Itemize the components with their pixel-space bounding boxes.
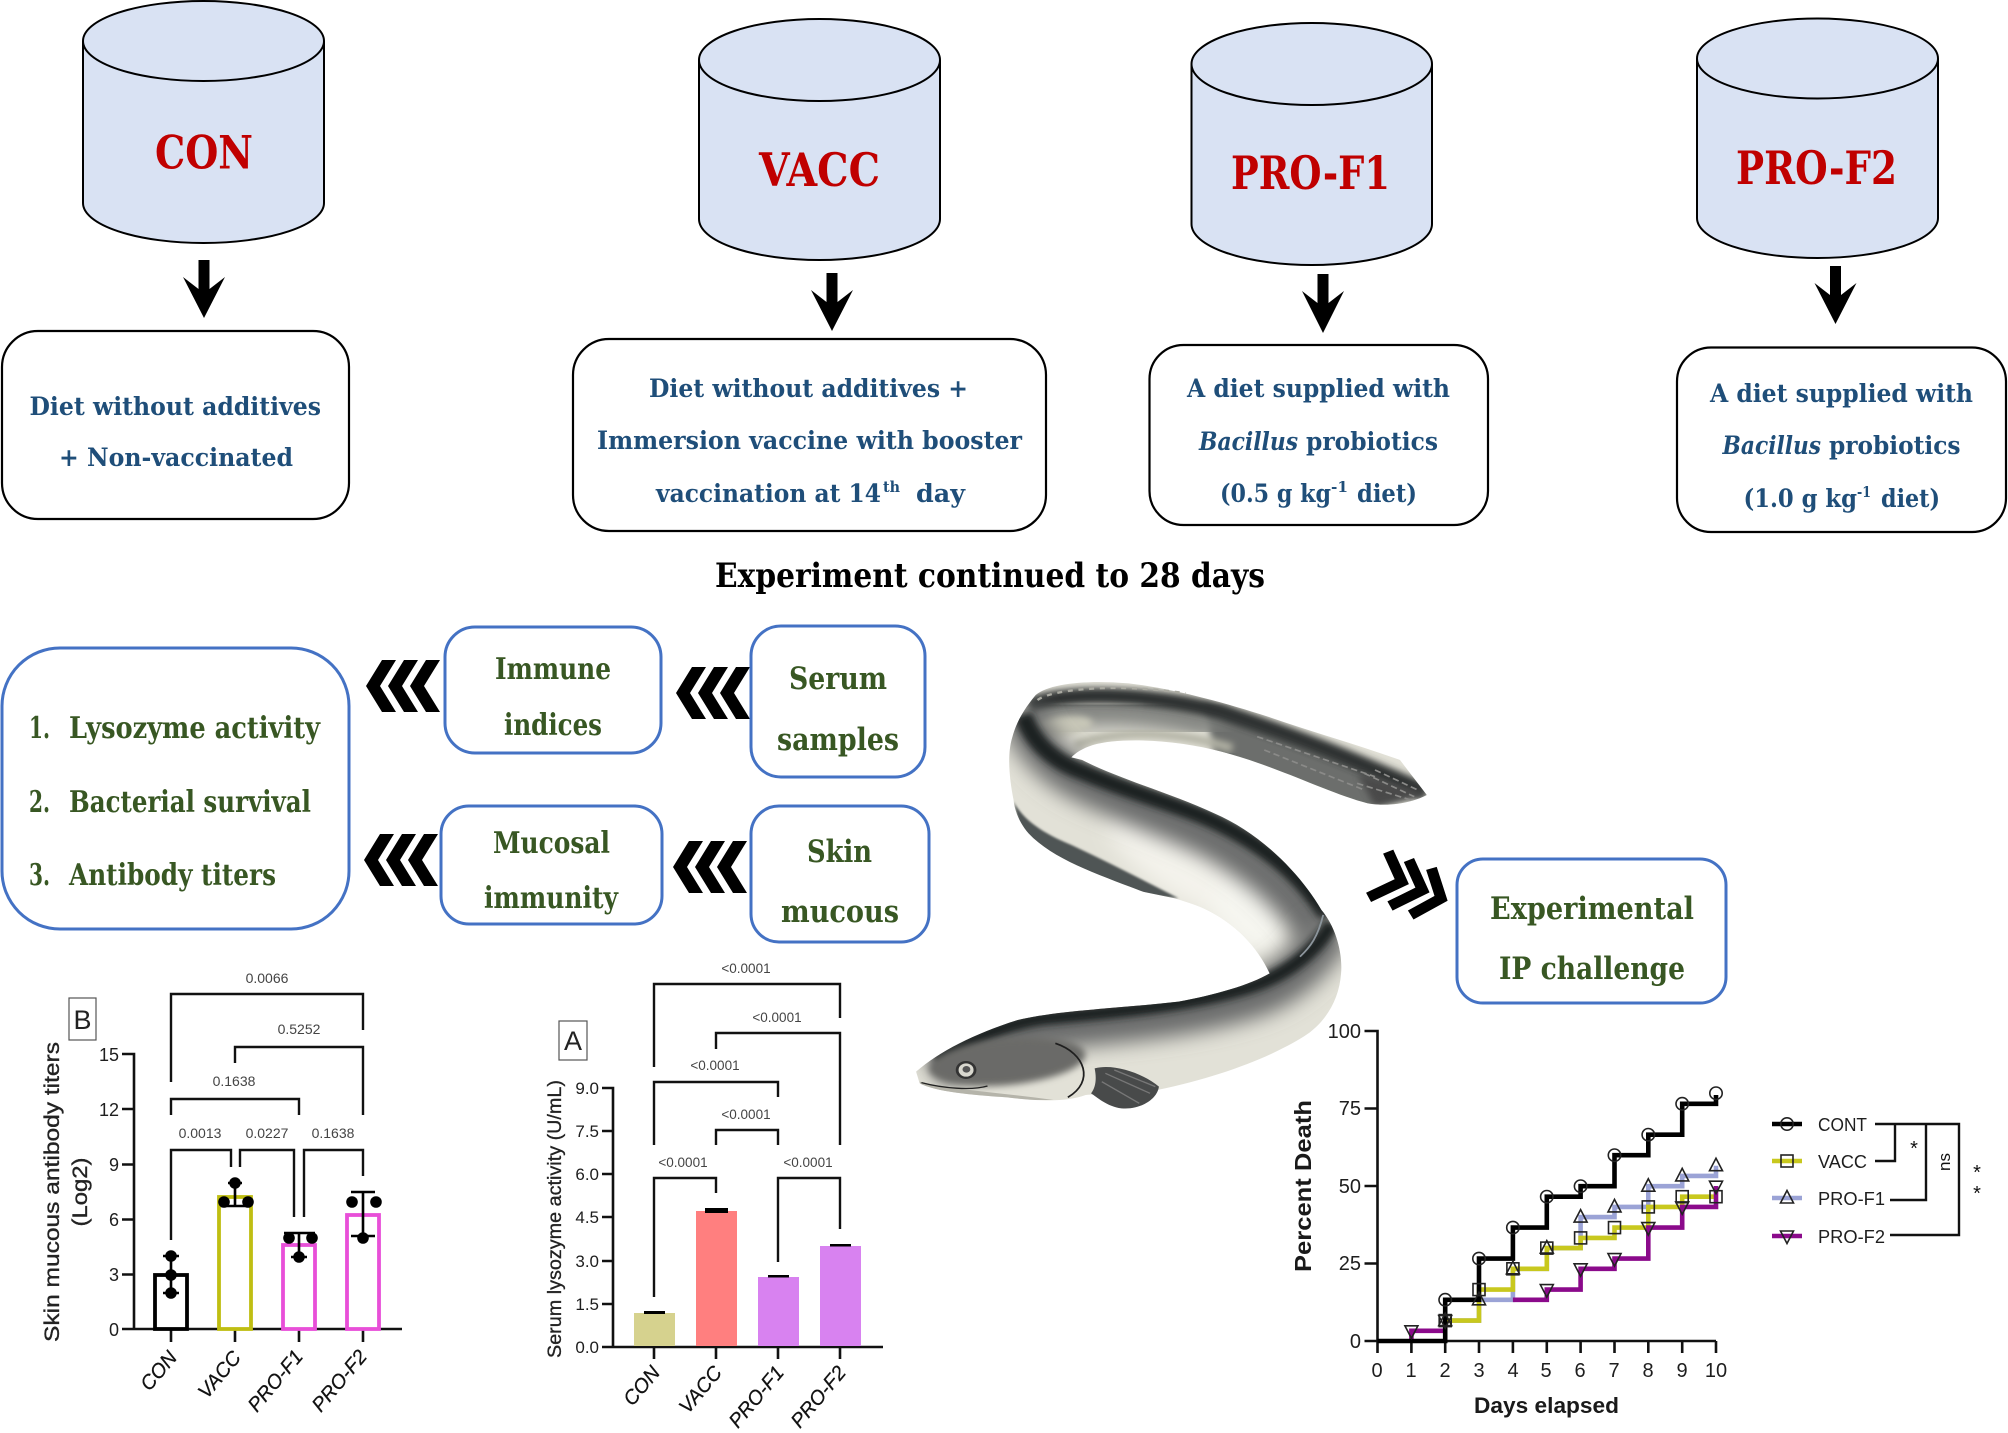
y tick labels: 25 bbox=[1339, 1253, 1361, 1275]
p values bbox=[658, 961, 833, 1170]
y tick labels: 0 bbox=[109, 1320, 119, 1340]
box: immune indices: indices bbox=[504, 708, 602, 743]
p values: 0.0013 bbox=[179, 1125, 222, 1141]
box: CON diet: Diet without additives bbox=[30, 392, 321, 421]
box: VACC diet: Diet without additives + bbox=[649, 374, 968, 403]
box: serum samples: Serum bbox=[789, 661, 887, 697]
p values: 0.5252 bbox=[278, 1021, 321, 1037]
p values: 0.0066 bbox=[246, 970, 289, 986]
box: experimental IP challenge: IP challenge bbox=[1499, 951, 1685, 987]
legend bbox=[1772, 1115, 1885, 1247]
box: PRO-F1 diet: diet) bbox=[1357, 479, 1417, 508]
arrow: CON down bbox=[183, 260, 225, 318]
category labels bbox=[136, 1346, 372, 1416]
significance brackets: ns bbox=[1935, 1153, 1954, 1171]
y axis title: Serum lysozyme activity (U/mL) bbox=[545, 1080, 566, 1358]
box: VACC diet: vaccination at 14 bbox=[655, 479, 881, 508]
box: skin mucous bbox=[751, 806, 929, 942]
category labels: VACC bbox=[194, 1347, 246, 1403]
badge: B: B bbox=[73, 1005, 92, 1035]
box: PRO-F2 diet: A diet supplied with bbox=[1709, 379, 1973, 408]
axes bbox=[122, 1054, 402, 1342]
y axis title: Percent Death bbox=[1290, 1100, 1316, 1272]
chart: skin mucous antibody titers (B) bbox=[41, 970, 402, 1416]
error bars and data points bbox=[163, 1177, 382, 1299]
significance brackets: * bbox=[1973, 1183, 1981, 1205]
p values bbox=[179, 970, 355, 1141]
box: PRO-F2 diet: (1.0 g kg bbox=[1744, 484, 1857, 513]
box: immune indices bbox=[445, 627, 661, 753]
x tick labels: 7 bbox=[1608, 1360, 1620, 1382]
box: PRO-F2 diet bbox=[1677, 348, 2006, 532]
cylinder: PRO-F1 bbox=[1192, 23, 1432, 265]
label: PRO-F1: PRO-F1 bbox=[1231, 146, 1390, 200]
heading: experiment duration: Experiment continued to 28 days bbox=[715, 556, 1265, 596]
box: VACC diet: Immersion vaccine with booster bbox=[597, 426, 1023, 455]
box: PRO-F1 diet: A diet supplied with bbox=[1186, 374, 1450, 403]
box: experimental IP challenge: Experimental bbox=[1490, 891, 1694, 927]
significance brackets: * bbox=[1973, 1162, 1981, 1184]
label: VACC: VACC bbox=[758, 143, 880, 197]
p values: <0.0001 bbox=[721, 1107, 771, 1122]
box: CON diet: + Non-vaccinated bbox=[59, 443, 293, 472]
box: PRO-F1 diet: probiotics bbox=[1306, 427, 1438, 456]
box: skin mucous: mucous bbox=[781, 894, 899, 930]
panel: VACC group bbox=[573, 19, 1046, 531]
x tick labels: 9 bbox=[1676, 1360, 1688, 1382]
badge: A bbox=[559, 1021, 587, 1060]
badge: B bbox=[69, 998, 96, 1040]
y tick labels bbox=[99, 1045, 119, 1340]
x axis title: Days elapsed bbox=[1474, 1393, 1619, 1418]
box: VACC diet: th bbox=[883, 478, 900, 496]
y tick labels: 100 bbox=[1328, 1021, 1361, 1043]
badge: A: A bbox=[564, 1026, 582, 1056]
line: PRO-F2 bbox=[1411, 1186, 1716, 1341]
box: assay list: Bacterial survival bbox=[69, 785, 311, 820]
axes bbox=[1364, 1031, 1716, 1353]
box: mucosal immunity: immunity bbox=[484, 881, 619, 916]
box: serum samples bbox=[751, 626, 925, 777]
significance brackets bbox=[171, 994, 363, 1240]
box: assay list: 2. bbox=[29, 785, 50, 820]
icon: chevrons to IP challenge bbox=[1369, 852, 1441, 915]
x tick labels bbox=[1371, 1360, 1727, 1382]
bars bbox=[155, 1197, 379, 1329]
y tick labels: 7.5 bbox=[575, 1122, 599, 1141]
panel: PRO-F2 group bbox=[1677, 18, 2006, 532]
legend: CONT bbox=[1818, 1115, 1867, 1135]
line: PRO-F1 bbox=[1445, 1166, 1716, 1321]
arrow: VACC down bbox=[811, 273, 853, 331]
box: PRO-F1 diet bbox=[1150, 345, 1488, 525]
box: experimental IP challenge bbox=[1457, 859, 1726, 1003]
x tick labels: 8 bbox=[1642, 1360, 1654, 1382]
arrow: PRO-F2 down bbox=[1814, 266, 1856, 324]
cylinder: PRO-F2 bbox=[1697, 18, 1938, 258]
y tick labels: 50 bbox=[1339, 1176, 1361, 1198]
category labels: PRO-F1 bbox=[244, 1346, 308, 1416]
box: PRO-F2 diet: Bacillus bbox=[1722, 431, 1821, 460]
y tick labels bbox=[1328, 1021, 1361, 1353]
x tick labels: 5 bbox=[1540, 1360, 1552, 1382]
category labels: VACC bbox=[675, 1362, 727, 1418]
box: assay list bbox=[2, 648, 349, 929]
cylinder: CON bbox=[83, 1, 324, 243]
legend: PRO-F2 bbox=[1818, 1227, 1885, 1247]
panel: PRO-F1 group bbox=[1150, 23, 1488, 525]
box: PRO-F1 diet: (0.5 g kg bbox=[1220, 479, 1331, 508]
axes bbox=[602, 1088, 883, 1359]
markers bbox=[1405, 1087, 1722, 1338]
box: skin mucous: Skin bbox=[807, 834, 872, 870]
y axis title: Skin mucous antibody titers bbox=[41, 1042, 64, 1342]
y tick labels: 75 bbox=[1339, 1098, 1361, 1120]
category labels: CON bbox=[136, 1347, 182, 1395]
box: PRO-F2 diet: -1 bbox=[1857, 483, 1871, 501]
p values: 0.1638 bbox=[213, 1073, 256, 1089]
box: mucosal immunity bbox=[441, 806, 662, 924]
p values: <0.0001 bbox=[721, 961, 771, 976]
p values: <0.0001 bbox=[752, 1010, 802, 1025]
y tick labels: 6.0 bbox=[575, 1165, 599, 1184]
y tick labels: 0.0 bbox=[575, 1338, 599, 1357]
y tick labels: 1.5 bbox=[575, 1295, 599, 1314]
category labels bbox=[619, 1362, 851, 1432]
y tick labels: 3.0 bbox=[575, 1252, 599, 1271]
arrow: PRO-F1 down bbox=[1302, 274, 1344, 333]
y tick labels bbox=[575, 1079, 599, 1357]
icon: chevrons from skin mucous bbox=[673, 841, 747, 893]
y tick labels: 4.5 bbox=[575, 1208, 599, 1227]
x tick labels: 6 bbox=[1574, 1360, 1586, 1382]
line: CONT bbox=[1378, 1095, 1716, 1341]
p values: 0.0227 bbox=[246, 1125, 289, 1141]
y tick labels: 0 bbox=[1350, 1331, 1361, 1353]
category labels: PRO-F1 bbox=[725, 1362, 789, 1432]
box: assay list: 3. bbox=[29, 858, 50, 893]
cylinder: VACC bbox=[699, 19, 940, 260]
y tick labels: 9.0 bbox=[575, 1079, 599, 1098]
significance brackets: * bbox=[1910, 1138, 1918, 1160]
error caps bbox=[644, 1208, 851, 1314]
box: assay list: 1. bbox=[29, 711, 50, 746]
label: PRO-F2: PRO-F2 bbox=[1736, 141, 1897, 195]
y tick labels: 12 bbox=[99, 1100, 119, 1120]
box: PRO-F2 diet: probiotics bbox=[1829, 431, 1960, 460]
p values: <0.0001 bbox=[783, 1155, 833, 1170]
x tick labels: 0 bbox=[1371, 1360, 1383, 1382]
legend: PRO-F1 bbox=[1818, 1189, 1885, 1209]
significance brackets bbox=[654, 984, 840, 1297]
y tick labels: 6 bbox=[109, 1210, 119, 1230]
y tick labels: 3 bbox=[109, 1265, 119, 1285]
box: assay list: Lysozyme activity bbox=[69, 711, 321, 746]
y axis title bbox=[41, 1042, 92, 1342]
box: PRO-F1 diet: -1 bbox=[1331, 478, 1348, 496]
label: CON: CON bbox=[155, 126, 253, 180]
panel: CON group bbox=[2, 1, 349, 519]
significance brackets bbox=[1875, 1124, 1981, 1235]
chart: survival percent death bbox=[1290, 1021, 1981, 1418]
x tick labels: 2 bbox=[1439, 1360, 1451, 1382]
chart: serum lysozyme activity (A) bbox=[545, 961, 883, 1432]
x tick labels: 3 bbox=[1473, 1360, 1485, 1382]
x tick labels: 1 bbox=[1405, 1360, 1417, 1382]
p values: <0.0001 bbox=[690, 1058, 740, 1073]
legend: VACC bbox=[1818, 1152, 1867, 1172]
box: assay list: Antibody titers bbox=[68, 858, 276, 893]
icon: chevrons from serum samples bbox=[676, 667, 750, 719]
box: CON diet bbox=[2, 331, 349, 519]
icon: chevrons from mucosal immunity bbox=[364, 834, 438, 886]
box: VACC diet: day bbox=[916, 479, 966, 508]
line: VACC bbox=[1445, 1197, 1716, 1321]
bars bbox=[634, 1211, 861, 1346]
box: PRO-F1 diet: Bacillus bbox=[1198, 427, 1298, 456]
p values: <0.0001 bbox=[658, 1155, 708, 1170]
box: serum samples: samples bbox=[777, 722, 899, 758]
y axis title: (Log2) bbox=[69, 1158, 92, 1226]
y tick labels: 15 bbox=[99, 1045, 119, 1065]
y tick labels: 9 bbox=[109, 1155, 119, 1175]
x tick labels: 4 bbox=[1507, 1360, 1519, 1382]
category labels: PRO-F2 bbox=[787, 1362, 851, 1432]
category labels: CON bbox=[619, 1362, 665, 1410]
x tick labels: 10 bbox=[1705, 1360, 1727, 1382]
category labels: PRO-F2 bbox=[308, 1346, 372, 1416]
icon: chevrons from immune indices bbox=[366, 660, 440, 712]
box: VACC diet bbox=[573, 339, 1046, 531]
illustration: eel bbox=[916, 682, 1427, 1108]
box: immune indices: Immune bbox=[495, 652, 611, 687]
p values: 0.1638 bbox=[312, 1125, 355, 1141]
box: PRO-F2 diet: diet) bbox=[1881, 484, 1940, 513]
box: mucosal immunity: Mucosal bbox=[493, 826, 610, 861]
